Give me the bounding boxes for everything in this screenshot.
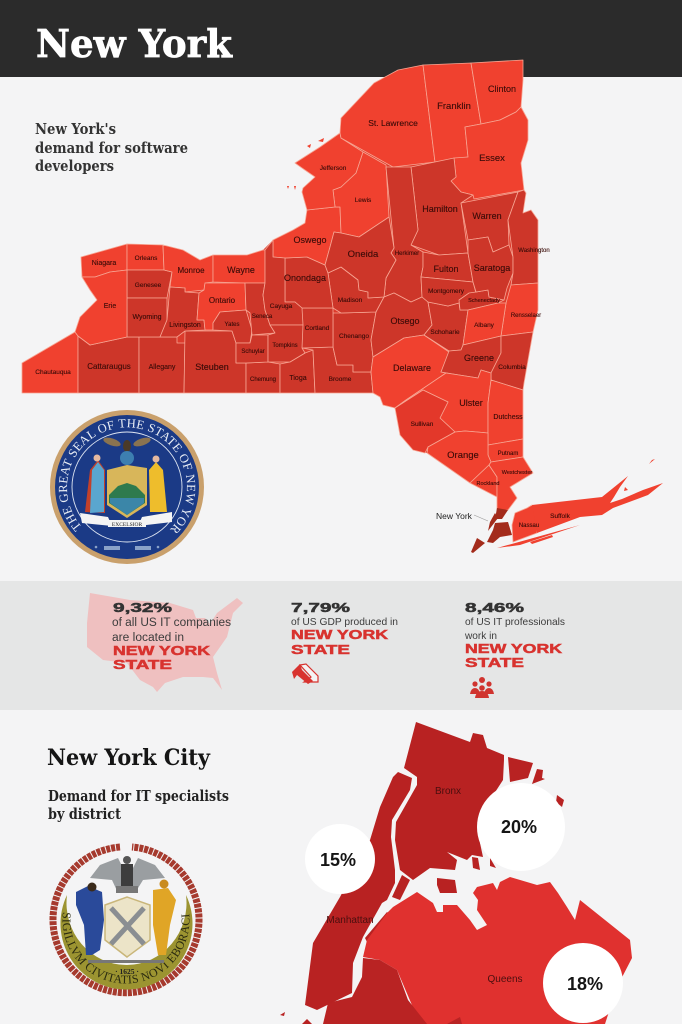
stat: IT professionals: NEW YORK	[465, 641, 563, 656]
borough labels: Manhattan	[326, 915, 374, 926]
header bar: New York	[36, 21, 233, 66]
borough labels: Bronx	[435, 786, 461, 797]
county: Lewis	[333, 152, 389, 237]
county: Ontario	[197, 283, 246, 330]
county: Saratoga	[468, 237, 513, 300]
county labels	[35, 84, 571, 529]
heading: New York's demand for software developers: New York's	[35, 120, 116, 138]
stat: IT professionals: 8,46%	[465, 600, 525, 615]
county: Jefferson	[295, 133, 363, 210]
county: Livingston	[160, 287, 205, 337]
borough labels	[326, 786, 523, 985]
county: Columbia	[491, 332, 533, 390]
seal: State of New York	[50, 410, 204, 564]
statistics band	[0, 581, 682, 710]
county labels: Saratoga	[474, 263, 510, 273]
callout: 20%	[477, 783, 565, 871]
county labels: Westchester	[502, 470, 532, 476]
map: New York State counties	[22, 60, 663, 553]
stat: IT professionals	[464, 600, 565, 670]
county: Rensselaer	[501, 283, 538, 336]
county labels: Delaware	[393, 363, 431, 373]
subheading: demand by district: by district	[48, 805, 121, 823]
county: Herkimer	[384, 167, 423, 302]
county: Yates	[213, 310, 252, 343]
county: Erie	[75, 270, 127, 345]
county labels: Washington	[518, 248, 550, 254]
county: Oneida	[325, 217, 396, 298]
county: Warren	[461, 192, 518, 252]
header bar	[0, 0, 682, 77]
stat: IT companies: of all US IT companies	[112, 617, 231, 629]
county: Tompkins	[268, 325, 305, 362]
county: Dutchess	[488, 380, 523, 445]
county: Greene	[441, 336, 501, 378]
county labels: Montgomery	[428, 288, 465, 295]
county labels: Tompkins	[272, 343, 298, 349]
county: Westchester	[489, 457, 533, 510]
stat: IT professionals: work in	[464, 630, 497, 642]
county: Onondaga	[285, 257, 333, 308]
county labels: Erie	[104, 303, 116, 310]
subheading: demand by district	[48, 787, 229, 823]
county: Chemung	[246, 362, 280, 393]
county labels: Genesee	[135, 282, 162, 289]
seal: State of New York: EXCELSIOR	[112, 522, 142, 528]
county: Rockland	[470, 465, 497, 497]
county labels: Albany	[474, 322, 495, 329]
county labels: Nassau	[519, 523, 539, 529]
county: Montgomery	[421, 277, 476, 306]
county labels: Rockland	[477, 481, 499, 487]
county labels: Rensselaer	[511, 313, 541, 319]
county labels: Yates	[225, 322, 239, 328]
county labels: Greene	[464, 353, 494, 363]
map: New York City boroughs	[280, 722, 632, 1024]
county labels: Madison	[338, 297, 363, 304]
county labels: Chenango	[339, 333, 369, 340]
county labels: Schenectady	[468, 298, 500, 304]
heading: New York's demand for software developers: developers	[35, 157, 114, 175]
icon: arrows	[292, 664, 318, 684]
county: Orange	[427, 431, 491, 483]
county: Ulster	[395, 370, 491, 433]
county labels: Sullivan	[411, 421, 434, 428]
county labels: Hamilton	[422, 204, 458, 214]
stat: GDP: NEW YORK	[291, 627, 389, 642]
county labels: Steuben	[195, 362, 229, 372]
icon: people	[470, 677, 494, 698]
county labels: Fulton	[433, 264, 459, 274]
stat: GDP: 7,79%	[291, 600, 351, 615]
county: Seneca	[245, 283, 275, 335]
county: Wayne	[213, 250, 265, 283]
subheading: demand by district: Demand for IT specialists	[48, 787, 229, 805]
county: Genesee	[127, 270, 172, 298]
district: Queens	[363, 877, 632, 1024]
county labels: Livingston	[169, 322, 201, 329]
county: Schoharie	[424, 302, 468, 351]
county: Sullivan	[395, 390, 455, 453]
county: Wyoming	[127, 298, 167, 337]
county labels: Lewis	[355, 197, 372, 204]
county labels: Schoharie	[430, 329, 460, 336]
stat: GDP: of US GDP produced in	[291, 616, 398, 628]
stat: GDP: STATE	[291, 642, 350, 657]
county labels: Chautauqua	[35, 369, 71, 376]
county labels: Onondaga	[284, 273, 326, 283]
county labels: Suffolk	[550, 513, 571, 520]
county labels: Jefferson	[320, 165, 347, 172]
county labels: Cattaraugus	[87, 362, 131, 371]
county: Orleans	[127, 244, 164, 270]
county: Franklin	[423, 63, 481, 162]
county labels: Allegany	[149, 364, 176, 371]
stat: GDP	[291, 600, 398, 657]
county labels: Wyoming	[132, 314, 162, 321]
county labels: Cortland	[305, 325, 330, 332]
county labels: Herkimer	[395, 251, 419, 257]
callout: 18%: 18%	[567, 974, 603, 994]
heading: New York's demand for software developers	[35, 120, 188, 175]
county: Niagara	[81, 244, 127, 277]
district: Manhattan	[280, 772, 412, 1024]
county: Broome	[302, 347, 373, 393]
heading: New York City: New York City	[47, 745, 211, 771]
county labels: Clinton	[488, 84, 516, 94]
county labels: Dutchess	[493, 414, 523, 421]
county labels: Essex	[479, 153, 505, 164]
stat: IT professionals: of US IT professionals	[465, 616, 565, 628]
county: Tioga	[280, 350, 315, 393]
county: Fulton	[421, 252, 473, 282]
stat: IT professionals: STATE	[465, 655, 524, 670]
county: Nassau	[512, 505, 537, 542]
county labels: Schuylar	[241, 349, 265, 355]
stat: IT companies	[112, 600, 231, 672]
county: Delaware	[371, 335, 449, 408]
state silhouette	[22, 60, 538, 510]
stat: IT companies: 9,32%	[113, 600, 173, 615]
county: Essex	[451, 107, 528, 199]
district: Brooklyn	[323, 958, 427, 1024]
county labels: Putnam	[498, 451, 518, 457]
callout: 15%: 15%	[320, 850, 356, 870]
county labels: Oswego	[293, 235, 327, 245]
county: Schenectady	[459, 290, 504, 310]
county: Oswego	[273, 207, 341, 265]
county: St. Lawrence	[340, 65, 435, 167]
county labels: Ontario	[209, 296, 236, 305]
county: Chenango	[333, 312, 376, 372]
county: Cattaraugus	[78, 336, 139, 393]
county: Madison	[328, 267, 384, 313]
seal: City of New York: SIGILLVM CIVITATIS NOVI EBORACI	[62, 912, 190, 984]
county labels: Chemung	[250, 377, 276, 383]
county: Washington	[508, 190, 538, 285]
callout: 15%	[305, 824, 375, 894]
county: Monroe	[163, 245, 213, 292]
county labels: Broome	[329, 376, 352, 383]
county: Allegany	[139, 337, 185, 393]
county labels: Niagara	[92, 260, 116, 267]
county: Clinton	[471, 60, 523, 124]
Lake and coastal islands	[287, 138, 655, 548]
county: Putnam	[488, 439, 523, 462]
New York City boroughs on state map	[471, 508, 512, 553]
county: Schuyler	[236, 335, 268, 363]
icon: USA map	[87, 593, 243, 692]
county labels: Monroe	[177, 266, 205, 275]
county: Cortland	[302, 308, 333, 348]
county labels: Franklin	[437, 101, 471, 112]
county labels: St. Lawrence	[368, 118, 418, 128]
county labels: Otsego	[390, 316, 420, 326]
callout: 20%: 20%	[501, 817, 537, 837]
county labels: Columbia	[498, 364, 526, 371]
county: Otsego	[371, 293, 432, 357]
county labels: Tioga	[289, 375, 307, 382]
county: Suffolk	[532, 476, 663, 533]
county labels: Oneida	[348, 249, 379, 260]
county: Cayuga	[263, 240, 303, 325]
county labels: Cayuga	[270, 303, 293, 310]
seal: City of New York: · 1625 ·	[115, 967, 139, 976]
seal: City of New York	[50, 844, 202, 996]
county labels: Seneca	[252, 314, 273, 320]
stat: IT companies: NEW YORK	[113, 643, 211, 658]
county: Albany	[463, 303, 506, 345]
callout: 18%	[543, 943, 623, 1023]
county labels: Warren	[472, 211, 502, 221]
stat: IT companies: are located in	[112, 632, 184, 644]
heading: New York's demand for software developers: demand for software	[35, 139, 188, 157]
callout: New York City on state map: New York	[436, 511, 473, 521]
county: Steuben	[184, 331, 246, 393]
county labels: Wayne	[227, 265, 255, 275]
county labels: Ulster	[459, 398, 483, 408]
borough labels: Queens	[487, 974, 523, 985]
stat: IT companies: STATE	[113, 657, 172, 672]
county: Chautauqua	[22, 332, 78, 393]
county labels: Orleans	[135, 255, 158, 262]
county: Hamilton	[411, 158, 473, 255]
district: Bronx	[395, 722, 564, 893]
callout: New York City on state map	[436, 511, 488, 521]
county labels: Orange	[447, 450, 479, 461]
